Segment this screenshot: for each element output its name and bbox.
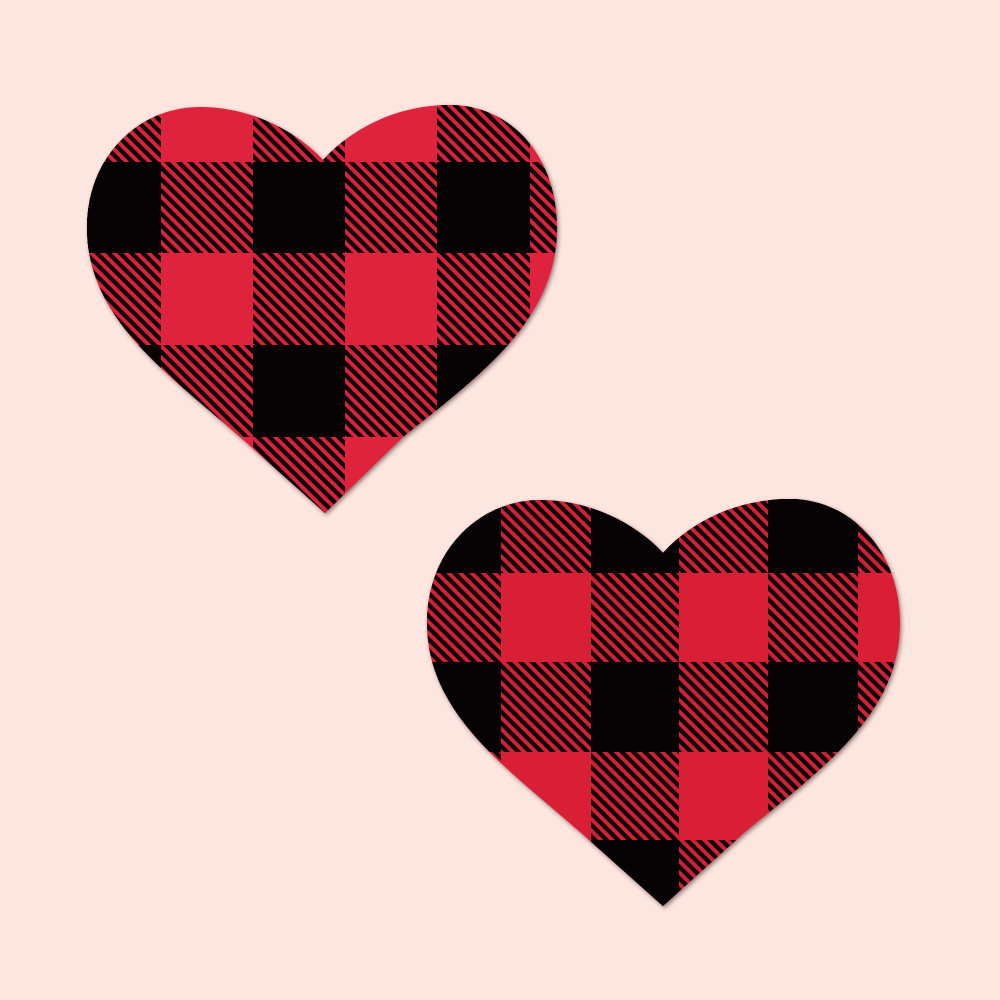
- heart: bottom-right plaid: [420, 495, 910, 915]
- heart: top-left plaid: [80, 100, 570, 520]
